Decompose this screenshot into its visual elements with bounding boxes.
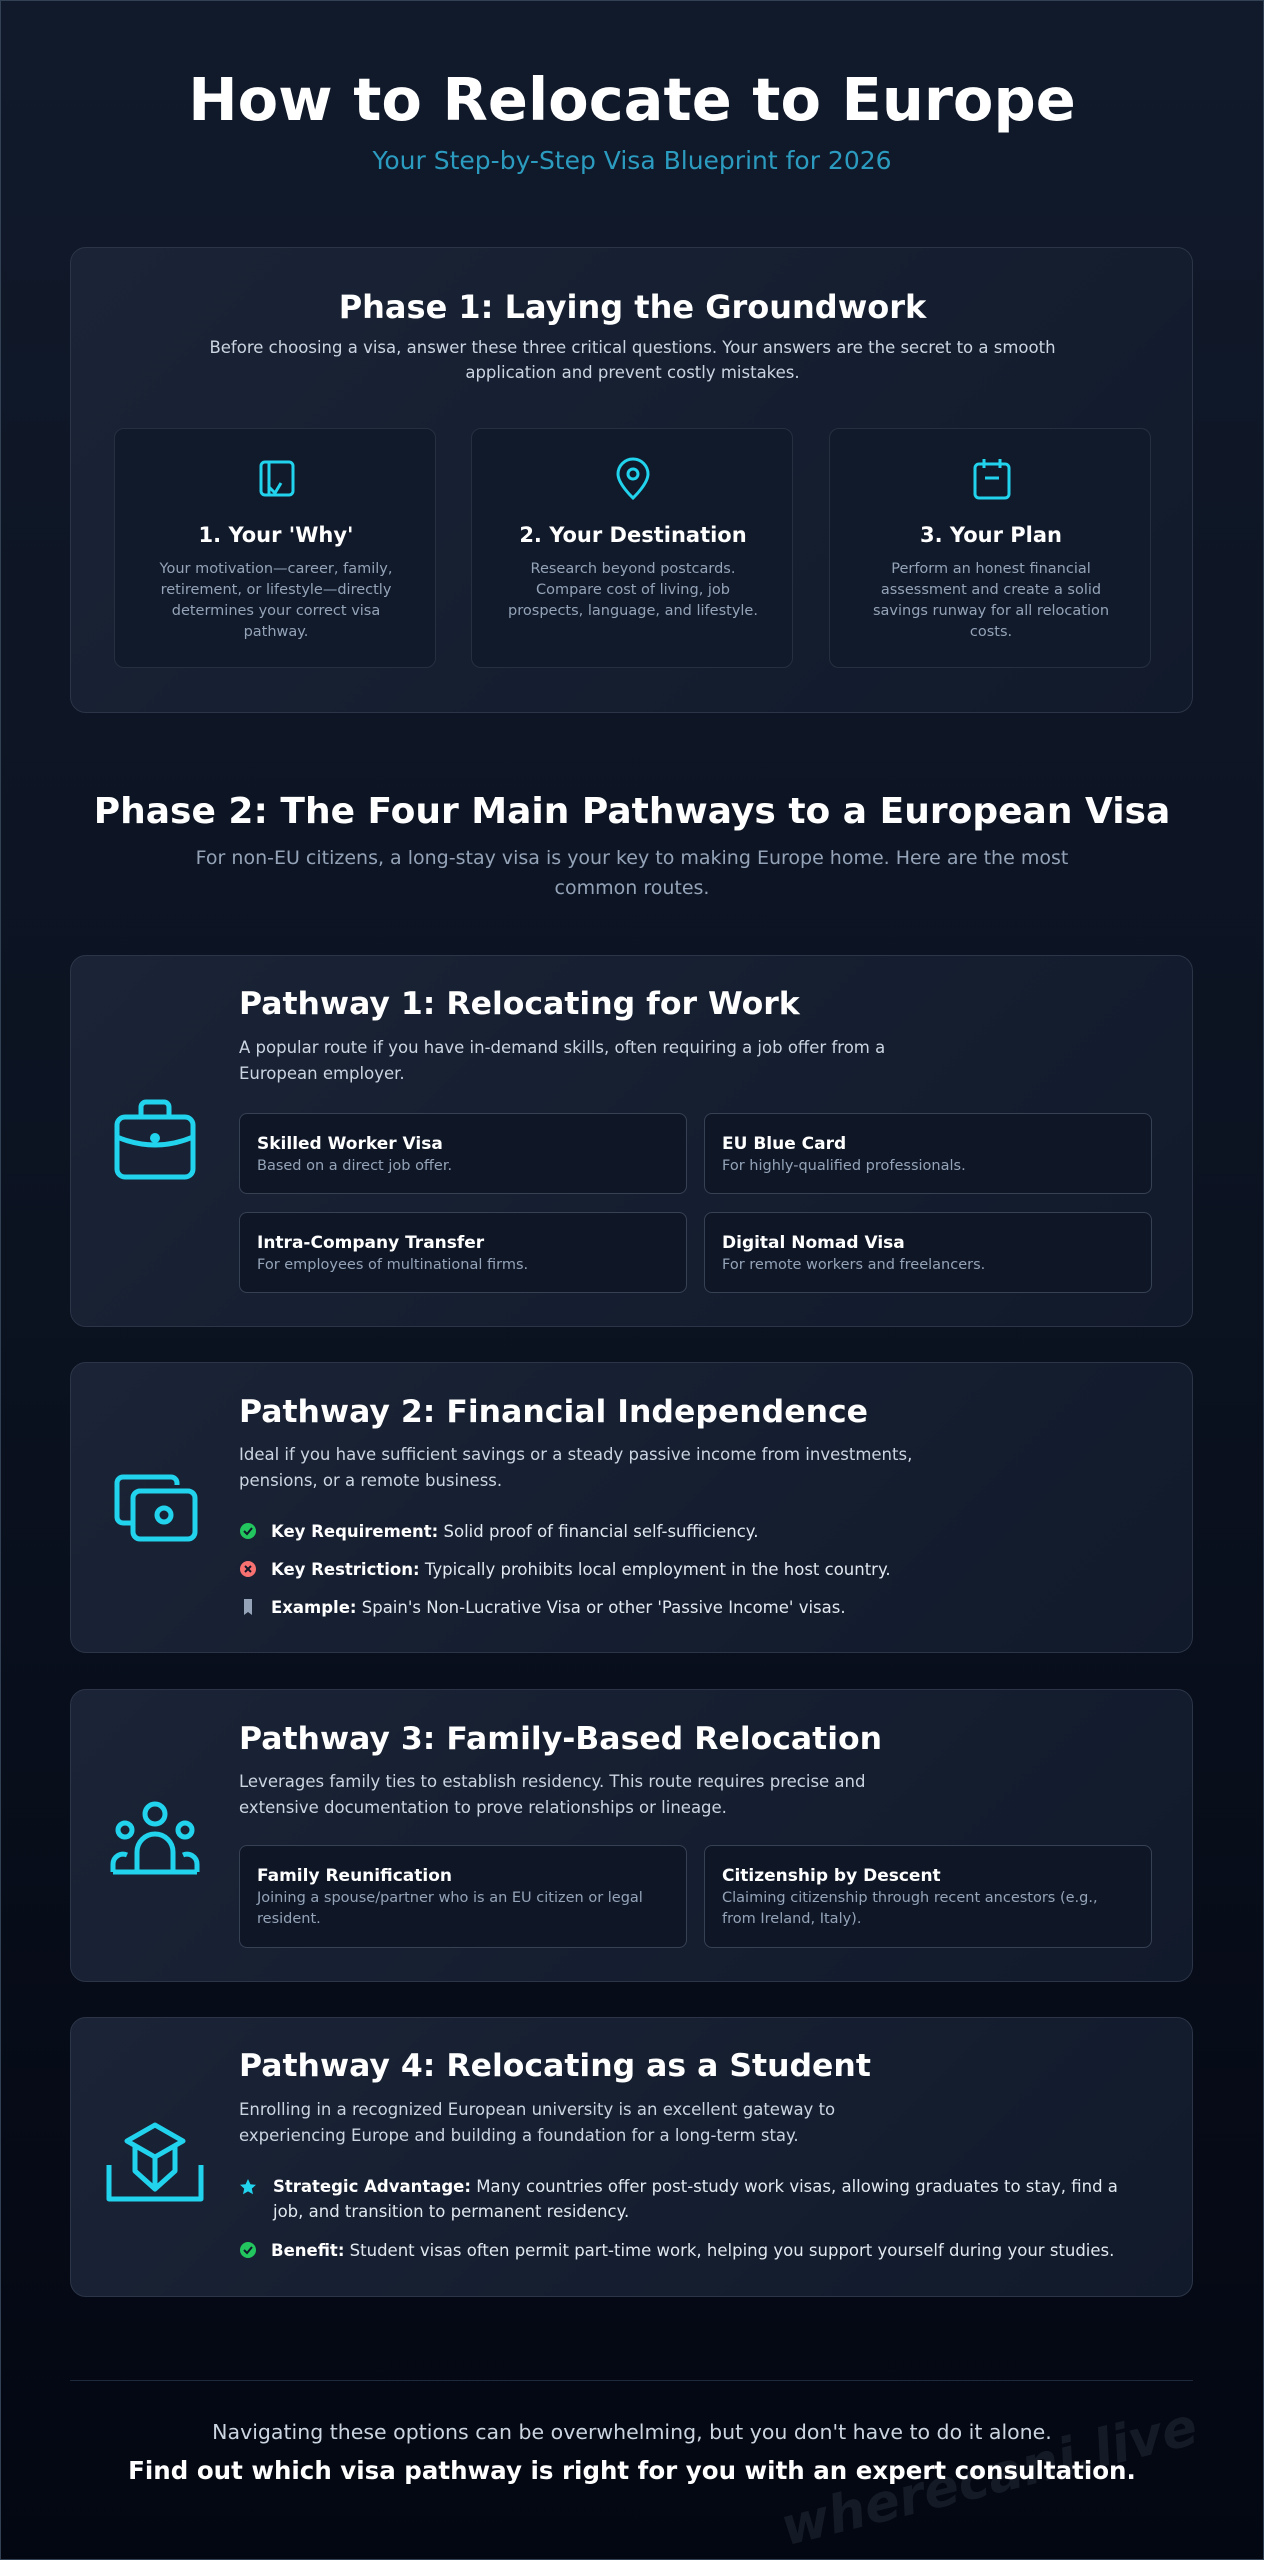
icon: calendar bbox=[974, 459, 1010, 500]
description: A popular route if you have in-demand skills, often requiring a job offer from a European employer. bbox=[239, 1038, 885, 1083]
sub: skilled worker: Based on a direct job offer. bbox=[257, 1158, 452, 1174]
icon: briefcase bbox=[114, 1100, 196, 1180]
text: Perform an honest financial assessment and create a solid savings runway for all relocation costs. bbox=[873, 561, 1109, 640]
watermark: wherecani.live bbox=[775, 2397, 1203, 2558]
description: Ideal if you have sufficient savings or a steady passive income from investments, pensions, or a remote business. bbox=[239, 1445, 912, 1490]
phase 1 description: Before choosing a visa, answer these three critical questions. Your answers are the secret to a smooth application and prevent costly mistakes. bbox=[209, 338, 1056, 382]
sub: descent: Claiming citizenship through recent ancestors (e.g., from Ireland, Italy). bbox=[722, 1890, 1098, 1927]
text: Your motivation—career, family, retirement, or lifestyle—directly determines your correct visa pathway. bbox=[160, 561, 392, 640]
subtitle: Your Step-by-Step Visa Blueprint for 2026 bbox=[372, 146, 892, 175]
heading: Pathway 3: Family-Based Relocation bbox=[239, 1721, 882, 1757]
sub: skilled worker: Skilled Worker Visa bbox=[257, 1134, 443, 1154]
panel: pathway 2 financial bbox=[70, 1362, 1193, 1653]
phase 2 heading: Phase 2: The Four Main Pathways to a European Visa bbox=[94, 791, 1170, 832]
description: Leverages family ties to establish residency. This route requires precise and extensive documentation to prove relationships or lineage. bbox=[239, 1772, 865, 1817]
sub: blue card: EU Blue Card bbox=[722, 1134, 846, 1154]
text: Research beyond postcards. Compare cost of living, job prospects, language, and lifestyle. bbox=[508, 561, 758, 619]
bullet: benefit: Benefit: Student visas often permit part-time work, helping you support yourself during your studies. bbox=[271, 2241, 1114, 2260]
heading: Pathway 4: Relocating as a Student bbox=[239, 2048, 871, 2084]
sub: reunification: Family Reunification bbox=[257, 1866, 452, 1886]
card: why bbox=[114, 428, 436, 668]
sub: digital nomad bbox=[704, 1212, 1152, 1293]
phase 2 description: For non-EU citizens, a long-stay visa is your key to making Europe home. Here are the most common routes. bbox=[196, 847, 1068, 899]
sub: digital nomad: For remote workers and freelancers. bbox=[722, 1257, 985, 1273]
sub: descent: Citizenship by Descent bbox=[722, 1866, 941, 1886]
footer text: Navigating these options can be overwhelming, but you don't have to do it alone. bbox=[212, 2420, 1052, 2444]
sub: intra-company bbox=[239, 1212, 687, 1293]
footer call to action: Find out which visa pathway is right for you with an expert consultation. bbox=[128, 2456, 1136, 2485]
icon: pin bbox=[616, 458, 650, 500]
bullet: example: Example: Spain's Non-Lucrative Visa or other 'Passive Income' visas. bbox=[271, 1598, 846, 1617]
sub: intra-company: For employees of multinational firms. bbox=[257, 1257, 528, 1273]
sub: skilled worker bbox=[239, 1113, 687, 1194]
card: plan bbox=[829, 428, 1151, 668]
bullet: advantage: Strategic Advantage: Many countries offer post-study work visas, allowing graduates to stay, find a job, and transition to permanent residency. bbox=[273, 2177, 1118, 2221]
panel: pathway 1 work bbox=[70, 955, 1193, 1327]
bullet: requirement: Key Requirement: Solid proof of financial self-sufficiency. bbox=[271, 1522, 758, 1541]
heading: 1. Your 'Why' bbox=[199, 523, 353, 547]
icon: graduation bbox=[106, 2122, 204, 2202]
icon: money bbox=[114, 1474, 198, 1542]
sub: descent bbox=[704, 1845, 1152, 1948]
sub: reunification bbox=[239, 1845, 687, 1948]
heading: 3. Your Plan bbox=[920, 523, 1062, 547]
panel: pathway 3 family bbox=[70, 1689, 1193, 1982]
description: Enrolling in a recognized European university is an excellent gateway to experiencing Europe and building a foundation for a long-term stay. bbox=[239, 2100, 835, 2145]
sub: blue card: For highly-qualified professionals. bbox=[722, 1158, 966, 1174]
heading: Pathway 2: Financial Independence bbox=[239, 1394, 868, 1430]
sub: digital nomad: Digital Nomad Visa bbox=[722, 1233, 905, 1253]
phase 1 heading: Phase 1: Laying the Groundwork bbox=[339, 288, 926, 326]
card: destination bbox=[471, 428, 793, 668]
title: How to Relocate to Europe bbox=[188, 65, 1076, 134]
sub: blue card bbox=[704, 1113, 1152, 1194]
heading: Pathway 1: Relocating for Work bbox=[239, 986, 800, 1022]
sub: intra-company: Intra-Company Transfer bbox=[257, 1233, 484, 1253]
icon: book bbox=[260, 460, 294, 496]
bullet: restriction: Key Restriction: Typically prohibits local employment in the host country. bbox=[271, 1560, 891, 1579]
heading: 2. Your Destination bbox=[519, 523, 747, 547]
sub: reunification: Joining a spouse/partner who is an EU citizen or legal resident. bbox=[257, 1890, 643, 1927]
panel: phase 1 bbox=[70, 247, 1193, 713]
panel: pathway 4 student bbox=[70, 2017, 1193, 2297]
icon: family bbox=[110, 1802, 200, 1874]
